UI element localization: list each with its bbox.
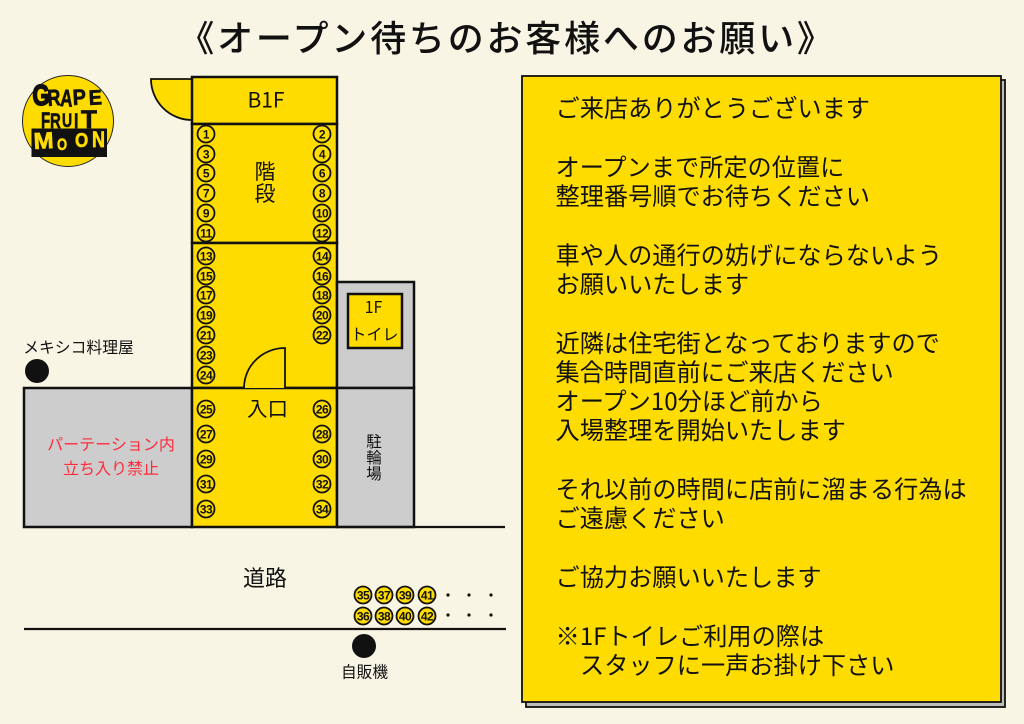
panel: notice: ご遠慮ください [556, 499, 725, 534]
road lower edge [24, 628, 506, 630]
bicycle parking: 場 [366, 462, 382, 484]
1F corridor [192, 243, 337, 388]
queue numbers: 40 [399, 609, 412, 623]
title: 《オープン待ちのお客様へのお願い》 [178, 10, 836, 62]
queue numbers [198, 126, 436, 624]
bicycle parking: 輪 [366, 446, 382, 468]
queue numbers: 8 [319, 186, 326, 200]
queue numbers: 16 [316, 269, 329, 283]
panel: notice: オープン10分ほど前から [556, 382, 823, 417]
vending machine [341, 634, 388, 682]
panel: notice: 整理番号順でお待ちください [556, 177, 870, 212]
partition area: パーテーション内 [47, 431, 175, 455]
logo: A [60, 85, 73, 112]
queue numbers: 34 [316, 502, 329, 516]
queue numbers: 29 [200, 452, 213, 466]
queue numbers: 19 [200, 308, 213, 322]
logo: P [72, 85, 87, 110]
queue numbers: 5 [203, 166, 210, 180]
logo: F [41, 108, 50, 133]
queue numbers: 30 [316, 452, 329, 466]
queue numbers: 23 [200, 348, 213, 362]
Mexican restaurant: メキシコ料理屋 [23, 335, 134, 358]
floor: B1F: B1F [247, 84, 285, 114]
logo: O [75, 129, 88, 151]
queue numbers: 13 [200, 249, 213, 263]
logo [22, 76, 114, 166]
queue numbers: 2 [319, 127, 326, 141]
panel: notice [522, 76, 1005, 707]
door: entrance [244, 348, 285, 388]
queue numbers: 3 [203, 147, 210, 161]
queue numbers: 41 [421, 588, 434, 602]
entrance area: 入口 [247, 392, 288, 422]
queue numbers: 14 [316, 249, 329, 263]
road label: 道路 [243, 561, 287, 593]
queue numbers: 18 [316, 288, 329, 302]
door: B1F [151, 79, 192, 120]
partition area: 立ち入り禁止 [63, 455, 159, 479]
stairs [192, 124, 337, 243]
queue numbers: 15 [200, 269, 213, 283]
partition area [24, 388, 192, 527]
panel: notice: お願いいたします [556, 265, 749, 300]
panel: notice: スタッフに一声お掛け下さい [580, 646, 894, 681]
queue numbers: 35 [357, 588, 370, 602]
entrance area [192, 388, 337, 527]
queue numbers: 4 [319, 147, 326, 161]
logo: R [50, 108, 61, 133]
continuation dots [446, 593, 493, 617]
queue numbers: 12 [316, 226, 329, 240]
toilet block: 1F [365, 294, 383, 318]
panel: notice: ご協力お願いいたします [556, 558, 822, 593]
panel: notice: ご来店ありがとうございます [556, 89, 870, 124]
panel: notice: 集合時間直前にご来店ください [556, 353, 894, 388]
logo: T [81, 106, 97, 134]
floor: B1F [192, 77, 337, 124]
panel: notice: オープンまで所定の位置に [556, 148, 844, 183]
panel: notice: 近隣は住宅街となっておりますので [556, 324, 940, 359]
Mexican restaurant [23, 335, 134, 383]
queue numbers: 7 [203, 186, 210, 200]
bicycle parking [337, 388, 414, 527]
panel: notice: 入場整理を開始いたします [556, 411, 846, 446]
logo: G [32, 80, 50, 112]
queue numbers: 24 [200, 368, 213, 382]
queue numbers: 1 [203, 127, 210, 141]
logo: E [88, 86, 103, 110]
toilet block: トイレ [350, 321, 399, 345]
queue numbers: 37 [378, 588, 391, 602]
queue numbers: 28 [316, 427, 329, 441]
logo: M [33, 127, 54, 154]
vending machine: 自販機 [341, 660, 388, 682]
queue numbers: 36 [357, 609, 370, 623]
panel: notice: ※1Fトイレご利用の際は [556, 617, 824, 652]
queue numbers: 20 [316, 308, 329, 322]
stairs: 段 [254, 178, 276, 208]
queue numbers: 38 [378, 609, 391, 623]
queue numbers: 42 [421, 609, 434, 623]
panel: notice: 車や人の通行の妨げにならないよう [556, 236, 942, 271]
panel: notice: それ以前の時間に店前に溜まる行為は [556, 470, 967, 505]
queue numbers: 6 [319, 166, 326, 180]
logo: U [62, 110, 72, 132]
queue numbers: 21 [200, 328, 213, 342]
logo: R [47, 85, 61, 112]
queue numbers: 32 [316, 477, 329, 491]
bicycle parking: 駐 [366, 430, 382, 452]
toilet block [337, 282, 414, 388]
queue numbers: 17 [200, 288, 213, 302]
logo: O [57, 135, 67, 154]
queue numbers: 10 [316, 206, 329, 220]
stairs: 階 [254, 156, 276, 186]
logo: N [92, 128, 105, 152]
queue numbers: 11 [200, 226, 213, 240]
queue numbers: 39 [399, 588, 412, 602]
queue numbers: 25 [200, 402, 213, 416]
queue numbers: 26 [316, 402, 329, 416]
road upper edge [337, 526, 505, 528]
queue numbers: 22 [316, 328, 329, 342]
queue numbers: 33 [200, 502, 213, 516]
queue numbers: 31 [200, 477, 213, 491]
queue numbers: 9 [203, 206, 210, 220]
queue numbers: 27 [200, 427, 213, 441]
logo: I [74, 109, 78, 132]
